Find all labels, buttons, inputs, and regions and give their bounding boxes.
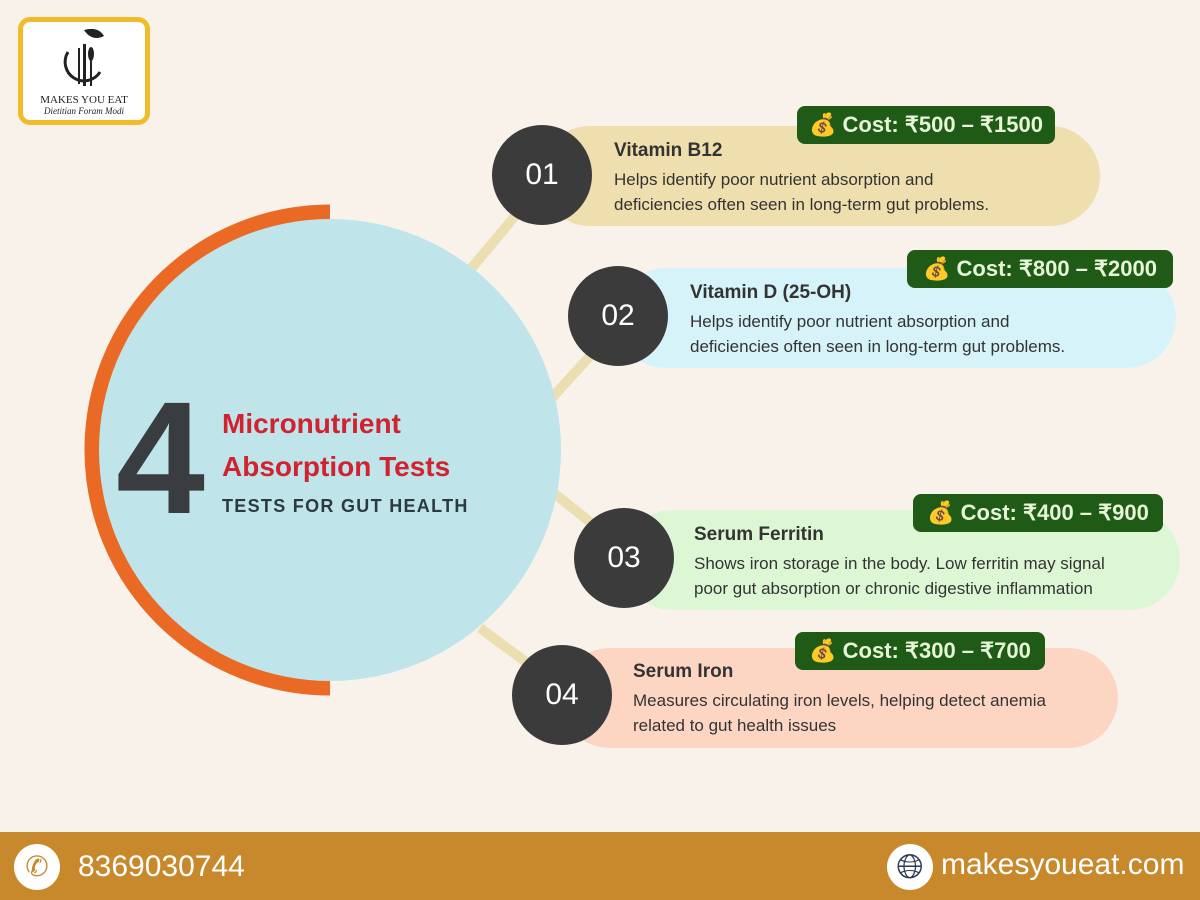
logo: Dietitian Foram Modi <box>44 106 124 116</box>
footer <box>0 832 1200 900</box>
footer: 8369030744 <box>78 850 245 883</box>
item 4 <box>512 632 1118 748</box>
logo <box>18 17 150 125</box>
heading: Absorption Tests <box>222 451 450 482</box>
text: 01 <box>525 158 559 191</box>
logo: MAKES YOU EAT <box>40 94 128 106</box>
text: Serum Ferritin <box>694 524 824 545</box>
item 2 <box>568 250 1176 368</box>
text: 💰 Cost: ₹800 – ₹2000 <box>923 256 1157 281</box>
footer: makesyoueat.com <box>941 848 1184 881</box>
icon: phone: ✆ <box>25 851 49 882</box>
text: 02 <box>601 299 635 332</box>
text: 04 <box>545 678 579 711</box>
item 3 <box>574 494 1180 610</box>
text: Vitamin D (25-OH) <box>690 282 851 303</box>
heading: 4 <box>116 368 205 547</box>
heading: TESTS FOR GUT HEALTH <box>222 496 469 516</box>
heading: Micronutrient <box>222 408 401 439</box>
heading <box>116 368 469 547</box>
text: Shows iron storage in the body. Low ferritin may signal <box>694 554 1105 573</box>
icon: globe: 🌐︎ <box>896 848 924 886</box>
icon: globe <box>887 844 933 890</box>
item 1 <box>492 106 1100 226</box>
text: Serum Iron <box>633 661 733 682</box>
text: poor gut absorption or chronic digestive inflammation <box>694 579 1093 598</box>
icon: phone <box>14 844 60 890</box>
text: 💰 Cost: ₹400 – ₹900 <box>927 500 1149 525</box>
text: Vitamin B12 <box>614 140 722 161</box>
text: 03 <box>607 541 641 574</box>
text: Measures circulating iron levels, helping detect anemia <box>633 691 1046 710</box>
text: 💰 Cost: ₹500 – ₹1500 <box>809 112 1043 137</box>
text: deficiencies often seen in long-term gut problems. <box>614 195 989 214</box>
text: deficiencies often seen in long-term gut problems. <box>690 337 1065 356</box>
text: related to gut health issues <box>633 716 836 735</box>
text: Helps identify poor nutrient absorption and <box>614 170 933 189</box>
text: Helps identify poor nutrient absorption and <box>690 312 1009 331</box>
text: 💰 Cost: ₹300 – ₹700 <box>809 638 1031 663</box>
